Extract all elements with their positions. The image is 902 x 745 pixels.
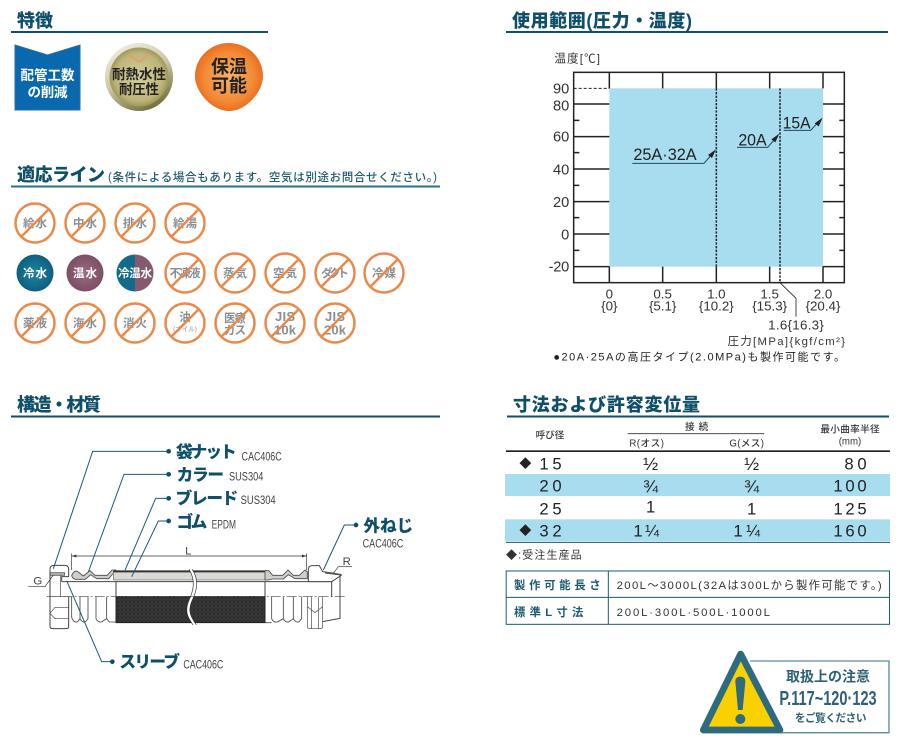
icon: 蒸気: 蒸気	[223, 266, 248, 280]
icon: 薬液	[16, 304, 54, 342]
chart: x axis labels: 0.5	[653, 287, 672, 302]
table: production lengths: 製作可能長さ	[514, 578, 601, 592]
diagram: hose structure	[28, 442, 413, 671]
callout: text: をご覧ください	[795, 712, 867, 725]
icon: 蒸気	[216, 254, 254, 292]
icon: 消火: 消火	[123, 316, 148, 330]
chart: label 20A: 20A	[738, 131, 768, 150]
callout: frame	[750, 661, 889, 733]
callout: 袋ナット: CAC406C	[242, 449, 282, 463]
chart: y axis labels: 40	[553, 162, 569, 178]
heading: 使用範囲(圧力・温度): 使用範囲(圧力・温度)	[512, 10, 692, 31]
table: row 20: ¾	[643, 476, 659, 496]
chart: x axis labels: {0}	[601, 299, 618, 314]
icon: 耐熱水性耐圧性 badge: 耐熱水性	[112, 66, 166, 82]
chart: label 15A: 15A	[783, 113, 812, 132]
callout: カラー: SUS304	[229, 470, 264, 484]
table: row 25: 1	[646, 498, 655, 517]
chart: x axis labels: 1.5	[760, 287, 779, 302]
chart: axis title: 圧力[MPa]{kgf/cm²}	[728, 335, 845, 348]
icon: 海水	[66, 304, 104, 342]
table: row 25: 1	[747, 499, 756, 518]
table: row stripes	[505, 474, 890, 542]
table: row 15: ◆	[519, 456, 531, 470]
icon: JIS 10k: 10k	[274, 322, 297, 338]
table: row 15: 15	[539, 454, 562, 473]
callout: スリーブ	[67, 581, 224, 671]
icon: 医療ガス: 医療	[224, 311, 246, 325]
icon: ダクト	[316, 254, 354, 292]
icon: 空気: 空気	[273, 266, 298, 280]
icon: 消火	[116, 304, 154, 342]
heading: 特徴: 特徴	[17, 10, 53, 31]
table: header	[536, 421, 880, 450]
icon: 医療ガス	[216, 304, 254, 342]
chart: y axis labels: -20	[549, 260, 569, 276]
dimension: R	[333, 556, 352, 573]
chart: y axis labels: 0	[561, 227, 569, 243]
callout: 外ねじ	[323, 516, 413, 570]
table: header: 呼び径	[536, 430, 565, 442]
icon: 保温可能 badge	[195, 43, 263, 111]
callout: text: 取扱上の注意	[786, 669, 870, 685]
diagram: center line	[47, 596, 347, 598]
table: row 20: ¾	[744, 476, 760, 496]
chart: frame and ticks	[574, 72, 844, 283]
icon: 冷水: 冷水	[23, 266, 48, 280]
table: row 15: 80	[844, 454, 867, 473]
table: row 25	[539, 498, 867, 518]
chart: note: ●20A·25Aの高圧タイプ(2.0MPa)も製作可能です。	[553, 350, 845, 364]
callout: 袋ナット: 袋ナット	[176, 442, 237, 462]
icon: 冷温水: 冷温水	[118, 266, 152, 280]
chart: 1.6 leader	[780, 283, 796, 317]
table: production lengths	[506, 571, 889, 624]
table: row 15	[519, 454, 867, 474]
icon: 中水: 中水	[73, 216, 98, 230]
table: row 32: 1 ¼	[733, 522, 761, 541]
icon: 給水: 給水	[23, 216, 48, 230]
icon: 給水	[16, 204, 54, 242]
icon: 不凍液	[166, 254, 204, 292]
chart: y axis labels: 80	[553, 99, 569, 115]
chart: y axis labels: 20	[553, 195, 569, 211]
icon: 海水: 海水	[73, 316, 98, 330]
callout: 袋ナット	[53, 442, 282, 569]
chart: x axis labels: {20.4}	[806, 299, 841, 314]
callout: ゴム: EPDM	[212, 517, 236, 531]
table: production lengths: 200L·300L·500L·1000L	[617, 607, 770, 619]
heading: 寸法および許容変位量: 寸法および許容変位量	[513, 394, 700, 415]
chart: pressure temperature range	[549, 52, 845, 364]
dimension: G: G	[33, 576, 42, 588]
table: header: G(メス)	[729, 439, 764, 450]
table: header: (mm)	[839, 437, 861, 448]
chart: y axis title: 温度[℃]	[554, 52, 600, 66]
table: header: 最小曲率半径	[820, 423, 880, 435]
chart: x axis labels: 2.0	[814, 287, 832, 302]
callout: ゴム	[132, 511, 236, 577]
icon: 温水: 温水	[73, 266, 98, 280]
table: header: 接 続	[685, 421, 709, 433]
table: row 32: ◆	[519, 524, 531, 538]
icon: JIS 20k: 20k	[324, 322, 347, 338]
table: row 20	[539, 476, 867, 496]
icon: 空気	[266, 254, 304, 292]
table: header: R(オス)	[629, 439, 664, 450]
heading: 適応ライン	[11, 164, 440, 188]
heading: 適応ライン: (条件による場合もあります。空気は別途お問合せください。)	[108, 170, 437, 184]
icon: 冷媒	[364, 254, 404, 292]
icon: 給湯	[166, 204, 204, 242]
icon: 耐熱水性耐圧性 badge: 耐圧性	[119, 81, 160, 97]
callout: カラー: カラー	[177, 466, 224, 485]
table: dimensions	[505, 421, 890, 624]
table: row 20: 100	[833, 477, 867, 496]
table: row 32: 1 ¼	[633, 522, 660, 541]
panel: line icons	[16, 204, 404, 342]
chart: safe operating area	[609, 88, 823, 267]
callout: 外ねじ: CAC406C	[363, 536, 404, 550]
icon: 配管工数の削減 badge: 配管工数	[20, 67, 75, 83]
callout: 外ねじ: 外ねじ	[363, 516, 413, 536]
icon: 冷水	[16, 254, 54, 292]
table: production lengths: 200L〜3000L(32Aは300Lから製作可能です。)	[617, 578, 882, 592]
chart: x axis labels: 0	[606, 287, 613, 302]
callout: handling caution	[703, 654, 889, 733]
icon: 温水	[66, 254, 104, 292]
diagram: break gap	[188, 570, 195, 625]
table: row 25: 25	[539, 499, 562, 518]
chart: x axis labels	[601, 287, 841, 332]
chart: x axis labels: {10.2}	[699, 299, 734, 314]
diagram: break outline	[187, 569, 197, 625]
table: header rule	[506, 450, 890, 452]
icon: 保温可能 badge: 可能	[211, 76, 247, 96]
icon: 冷温水	[116, 254, 154, 292]
note: 受注生産品: ◆:受注生産品	[506, 547, 582, 561]
chart: label 25A·32A: 25A·32A	[633, 145, 698, 164]
chart: x axis labels: 1.0	[707, 287, 726, 302]
icon: JIS 10k	[266, 304, 304, 342]
icon: 給湯: 給湯	[173, 216, 198, 230]
icon: 配管工数の削減 badge	[15, 45, 80, 110]
chart: y axis labels	[549, 81, 569, 276]
callout: スリーブ: スリーブ	[119, 651, 180, 671]
icon: 配管工数の削減 badge: の削減	[28, 84, 68, 100]
heading: 構造・材質: 構造・材質	[17, 394, 101, 415]
table: row 32: 32	[539, 522, 562, 541]
icon: 排水: 排水	[123, 216, 148, 230]
dimension: R: R	[343, 556, 351, 568]
callout: カラー	[88, 466, 264, 572]
dimension: L: L	[185, 545, 191, 557]
table: row 20: 20	[539, 477, 562, 496]
icon: JIS 20k: JIS	[325, 309, 345, 324]
callout: ブレード: SUS304	[241, 493, 276, 507]
table: row 15: ½	[744, 454, 759, 474]
callout: ブレード: ブレード	[176, 488, 238, 508]
icon: warning triangle	[703, 654, 780, 730]
icon: 薬液: 薬液	[23, 316, 48, 330]
callout: text	[779, 669, 877, 725]
table: row 25: 125	[833, 499, 867, 518]
icon: 油(オイル)	[166, 304, 204, 342]
icon: 油(オイル): (オイル)	[173, 325, 197, 333]
chart: y axis labels: 90	[553, 81, 569, 97]
icon: 不凍液: 不凍液	[170, 266, 201, 280]
icon: 医療ガス: ガス	[224, 323, 246, 337]
callout: ゴム: ゴム	[177, 511, 208, 531]
callout: ブレード	[125, 488, 276, 570]
chart: x axis labels: 1.6{16.3}	[768, 317, 824, 332]
chart: x axis labels: {5.1}	[649, 299, 677, 314]
table: row 32	[519, 522, 867, 541]
callout: スリーブ: CAC406C	[183, 657, 224, 671]
heading: 適応ライン: 適応ライン	[17, 164, 105, 185]
table: production lengths: 標準L寸法	[514, 605, 584, 619]
table: bottom rule	[506, 541, 890, 544]
icon: 中水	[66, 204, 104, 242]
dimension: L	[72, 545, 307, 570]
icon: 冷媒: 冷媒	[372, 266, 396, 280]
icon: 耐熱水性耐圧性 badge	[105, 43, 173, 111]
chart: y axis labels: 60	[553, 130, 569, 146]
diagram: hose body	[50, 565, 342, 629]
icon: JIS 20k	[316, 304, 354, 342]
table: row 15: ½	[643, 454, 658, 474]
icon: ダクト: ダクト	[321, 266, 349, 280]
icon: 保温可能 badge: 保温	[211, 57, 247, 77]
icon: JIS 10k: JIS	[275, 309, 295, 324]
table: row 32: 160	[833, 522, 867, 541]
icon: 排水	[116, 204, 154, 242]
dimension: G	[28, 575, 53, 588]
icon: 油(オイル): 油	[179, 310, 191, 324]
chart: x axis labels: {15.3}	[752, 299, 788, 314]
